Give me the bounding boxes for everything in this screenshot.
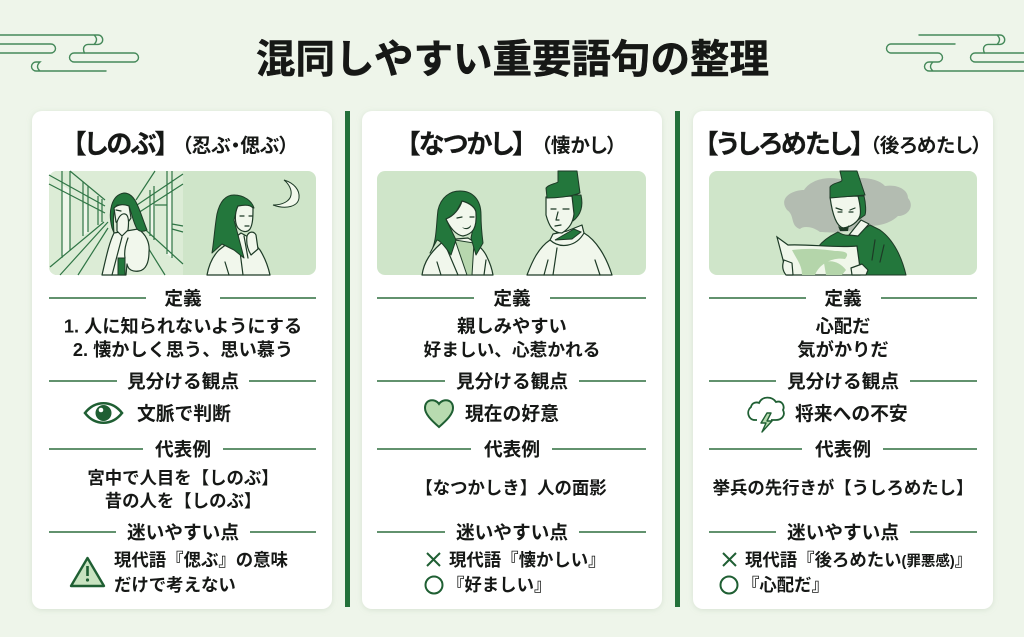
text: viewpoint: 文脈で判断 — [137, 403, 231, 424]
heading: うしろめたし: （後ろめたし） — [870, 135, 982, 157]
text: definition: 親しみやすい — [457, 316, 567, 336]
title: 混同しやすい重要語句の整理 — [256, 38, 769, 82]
text: wrong sense: 現代語『懐かしい』 — [449, 550, 606, 570]
text: examples — [87, 468, 279, 511]
text: right sense: 『心配だ』 — [742, 575, 829, 595]
heading: うしろめたし — [705, 129, 982, 159]
divider — [345, 111, 350, 607]
text: examples: 宮中で人目を【しのぶ】 — [87, 468, 279, 488]
panel: なつかし — [362, 111, 662, 609]
text: definition: 気がかりだ — [797, 339, 889, 360]
text: example: 挙兵の先行きが【うしろめたし】 — [713, 478, 973, 498]
text: viewpoint: 現在の好意 — [465, 403, 559, 424]
label: 代表例: 代表例 — [155, 439, 211, 460]
illustration: woman and courtier — [377, 171, 646, 275]
label: 迷いやすい点: 迷いやすい点 — [787, 522, 899, 543]
text: wrong sense: 現代語『後ろめたい(罪悪感)』 — [745, 550, 972, 570]
text: right sense: 『好ましい』 — [447, 575, 551, 595]
icon: heart — [425, 400, 453, 427]
text: pitfall: だけで考えない — [114, 575, 236, 595]
text: examples: 昔の人を【しのぶ】 — [105, 491, 261, 511]
label: 迷いやすい点: 迷いやすい点 — [127, 522, 239, 543]
label: 定義: 定義 — [493, 288, 531, 309]
heading: なつかし — [407, 129, 617, 159]
icon: cross — [427, 553, 440, 566]
text: pitfall — [114, 550, 288, 595]
heading: なつかし: 【なつかし】 — [407, 129, 524, 159]
heading: しのぶ: （忍ぶ・偲ぶ） — [182, 135, 289, 157]
icon: storm cloud — [748, 398, 784, 432]
label: 迷いやすい点: 迷いやすい点 — [456, 522, 568, 543]
label: 見分ける観点: 見分ける観点 — [787, 371, 899, 392]
text: definition — [64, 316, 302, 360]
text: viewpoint: 将来への不安 — [795, 403, 908, 424]
heading: うしろめたし: 【うしろめたし】 — [705, 129, 863, 159]
label: 定義: 定義 — [164, 288, 202, 309]
text: definition — [797, 316, 889, 360]
illustration: worried courtier with map — [709, 171, 977, 275]
panel: うしろめたし — [693, 111, 993, 609]
text: pitfall: 現代語『偲ぶ』の意味 — [114, 550, 288, 570]
heading: しのぶ: 【しのぶ】 — [73, 129, 167, 159]
icon: circle — [720, 576, 738, 594]
panel: しのぶ — [32, 111, 332, 609]
label: 定義: 定義 — [824, 288, 862, 309]
heading: なつかし: （懐かし） — [541, 134, 617, 157]
icon: cross — [723, 553, 736, 566]
text: definition: 好ましい、心惹かれる — [424, 340, 600, 360]
label: 代表例: 代表例 — [484, 439, 540, 460]
decoration: clouds right — [886, 35, 1024, 71]
icon: circle — [426, 576, 442, 594]
icon: eye — [85, 403, 122, 423]
label: 代表例: 代表例 — [815, 439, 871, 460]
icon: warning — [71, 558, 104, 586]
text: definition: 心配だ — [816, 316, 870, 336]
text: definition: 1. 人に知られないようにする — [64, 316, 302, 336]
heading: しのぶ — [73, 129, 289, 159]
text: definition — [424, 316, 600, 360]
divider — [675, 111, 680, 607]
text: example: 【なつかしき】人の面影 — [415, 478, 607, 498]
text: definition: 2. 懐かしく思う、思い慕う — [73, 340, 293, 360]
illustration: corridor and woman under moon — [49, 171, 316, 275]
label: 見分ける観点: 見分ける観点 — [456, 371, 568, 392]
decoration: clouds left — [0, 35, 138, 71]
label: 見分ける観点: 見分ける観点 — [127, 371, 239, 392]
